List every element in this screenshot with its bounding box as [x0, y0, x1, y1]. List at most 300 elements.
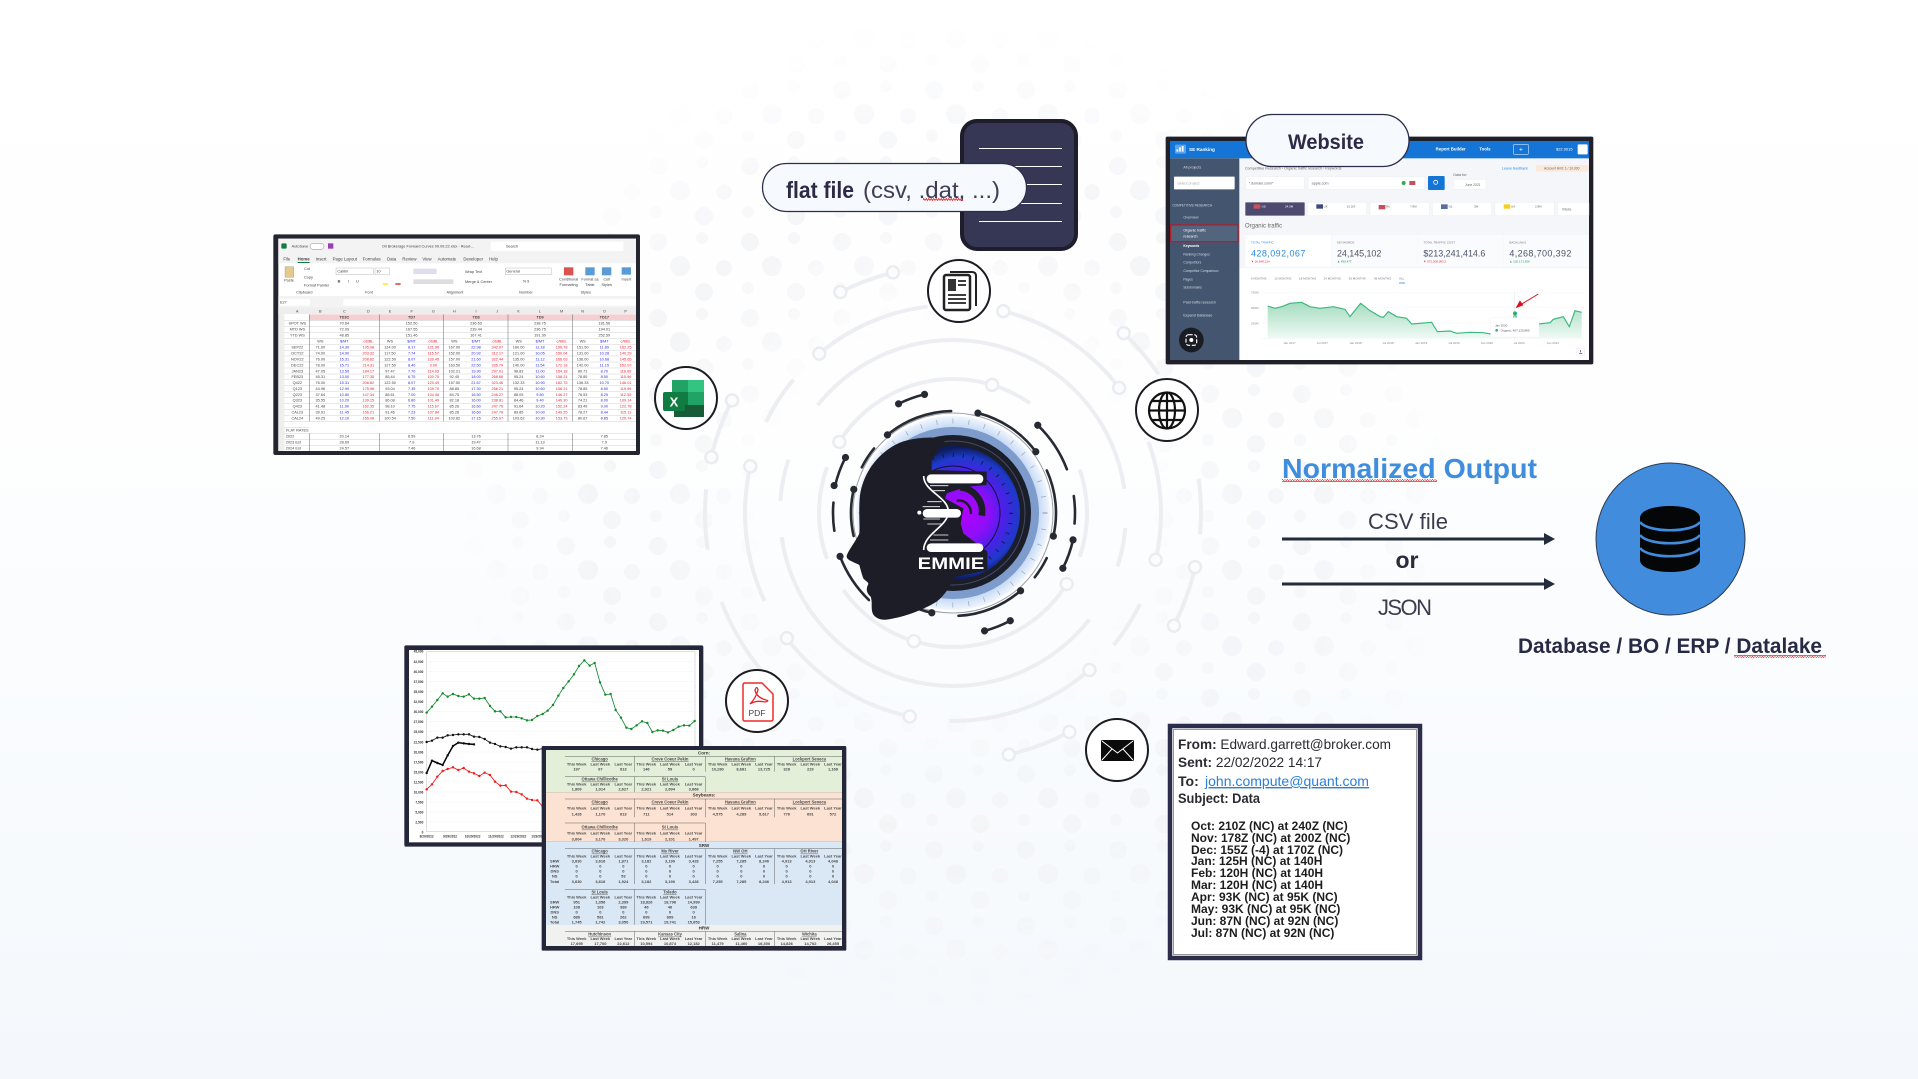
spreadsheet grid: 158.21	[556, 387, 568, 391]
SRW section: 686	[573, 915, 581, 920]
soybeans section: Lockport Seneca	[793, 799, 827, 804]
spreadsheet grid: 10.20	[535, 405, 545, 409]
website stat cards: $213,241,414.6	[1423, 248, 1485, 258]
website sidebar: Overview	[1183, 215, 1199, 219]
spreadsheet grid: 17.30	[471, 387, 481, 391]
spreadsheet grid: 8.50	[601, 387, 608, 391]
HRW section: 26,455	[827, 941, 840, 946]
panel: excel spreadsheet screenshot: Number	[519, 291, 534, 295]
spreadsheet grid: 11.12	[535, 357, 545, 361]
spreadsheet grid: 11.45	[340, 411, 349, 415]
SRW section: 1,745	[572, 920, 582, 925]
SRW section: HRW	[550, 864, 560, 869]
SRW section: 0	[622, 864, 625, 869]
spreadsheet grid: 102.21	[448, 369, 460, 373]
panel: excel spreadsheet screenshot: Insert	[622, 278, 632, 282]
website traffic chart: 6 MONTHS	[1251, 277, 1266, 281]
corn section: 2,627	[618, 787, 629, 792]
soybeans section: Last Year	[755, 805, 773, 810]
website stat cards: TOTAL TRAFFIC	[1251, 241, 1274, 245]
spreadsheet grid: 15.31	[340, 381, 349, 385]
SRW section: 15,653	[688, 920, 701, 925]
soybeans section: Last Year	[685, 830, 703, 835]
panel: email	[1170, 726, 1420, 958]
panel: excel spreadsheet screenshot: Automate	[438, 257, 457, 262]
SRW section: 7,255	[713, 859, 723, 864]
spreadsheet grid: 122.50	[384, 357, 396, 361]
spreadsheet grid: 342.97	[491, 346, 503, 350]
EMMIE central logo	[780, 340, 1126, 686]
spreadsheet grid: 98.83	[514, 369, 523, 373]
icon: database circle	[1596, 463, 1745, 615]
SRW section: 0	[645, 869, 648, 874]
head silhouette and DNA mark	[847, 437, 987, 620]
spreadsheet grid: 121.00	[513, 352, 525, 356]
spreadsheet grid: 100.54	[384, 417, 397, 421]
spreadsheet grid: 78.85	[578, 375, 587, 379]
spreadsheet grid: 121.96	[427, 346, 439, 350]
corn section	[567, 751, 842, 792]
SRW section: Total	[550, 920, 559, 925]
spreadsheet grid: 70.64	[340, 322, 350, 326]
website traffic chart: 750M	[1251, 291, 1259, 295]
website heading: organic traffic: Organic traffic	[1245, 224, 1282, 230]
SRW section: 19,741	[664, 920, 677, 925]
SRW section: NS	[552, 915, 558, 920]
SRW section: 18,826	[640, 900, 653, 905]
SRW section: SRW	[699, 843, 710, 848]
corn section: Last Week	[591, 761, 611, 766]
spreadsheet grid: 13.50	[340, 369, 349, 373]
spreadsheet grid: TD17	[600, 316, 609, 320]
panel: excel spreadsheet screenshot: View	[422, 257, 433, 262]
website top bar	[1170, 141, 1589, 158]
spreadsheet grid: I	[475, 309, 477, 313]
SRW section: 899	[667, 915, 674, 920]
SRW section: 0	[786, 874, 789, 879]
website country tabs: 7.8M	[1410, 205, 1417, 209]
soybeans section: Last Year	[615, 805, 633, 810]
spreadsheet grid: 37.64	[316, 393, 326, 397]
spreadsheet grid: 8.07	[408, 381, 415, 385]
corn section: 1,014	[595, 787, 606, 792]
spreadsheet grid: TD7	[408, 316, 415, 320]
website sidebar: Paid traffic research	[1183, 300, 1216, 304]
SRW section: 699	[643, 915, 650, 920]
SRW section: 0	[809, 864, 812, 869]
icon: globe	[1136, 379, 1198, 441]
SRW section: Last Week	[660, 894, 681, 899]
HRW section: 22,612	[617, 941, 630, 946]
spreadsheet grid: 118.69	[620, 369, 631, 373]
soybeans section: 711	[643, 811, 650, 816]
corn section: Last Year	[615, 782, 633, 787]
panel: excel spreadsheet screenshot: AutoSave	[292, 245, 308, 249]
SRW section: 0	[809, 869, 812, 874]
spreadsheet grid: 151.50	[577, 346, 589, 350]
spreadsheet grid: 8.00	[601, 399, 608, 403]
spreadsheet grid: 88.85	[450, 387, 459, 391]
spreadsheet grid: c/BBL	[492, 340, 502, 344]
HRW section: This Week	[637, 936, 657, 941]
spreadsheet grid: Q422	[293, 381, 302, 385]
SRW section: 0	[832, 869, 835, 874]
spreadsheet grid: 15.71	[340, 363, 349, 367]
spreadsheet grid: DEC22	[291, 363, 304, 367]
corn section: 328	[783, 766, 791, 771]
spreadsheet grid: 8.44	[601, 411, 609, 415]
website filters: Account limit: 1 / 10,000	[1544, 166, 1580, 170]
spreadsheet grid: 152.00	[448, 352, 460, 356]
spreadsheet grid: 162.35	[362, 405, 374, 409]
website sidebar: All projects	[1183, 166, 1201, 170]
spreadsheet grid: 127.50	[384, 363, 396, 367]
spreadsheet grid: 44.96	[316, 387, 325, 391]
SRW section: 3,616	[595, 859, 606, 864]
soybeans section: 4,289	[736, 811, 747, 816]
HRW section: Last Week	[732, 936, 752, 941]
HRW section	[567, 926, 842, 946]
spreadsheet grid: 120.49	[427, 357, 439, 361]
spreadsheet grid	[278, 307, 636, 451]
spreadsheet grid: WS	[580, 340, 586, 344]
corn section: This Week	[567, 761, 587, 766]
spreadsheet grid: 72.09	[340, 328, 349, 332]
spreadsheet grid: 10.68	[600, 357, 609, 361]
HRW section: Salina	[734, 932, 747, 937]
spreadsheet grid: 9.00	[601, 405, 608, 409]
soybeans section: 303	[690, 811, 698, 816]
spreadsheet grid: WS	[317, 340, 324, 344]
panel: pdf grain table	[542, 746, 846, 951]
spreadsheet grid: 268.66	[491, 375, 503, 379]
corn section: This Week	[637, 782, 657, 787]
y axis labels: 5,000	[415, 810, 424, 814]
website sidebar: Competitor Comparison	[1183, 269, 1219, 273]
website filters: Competitive Research › Organic traffic research › Keywords	[1245, 167, 1342, 171]
HRW section: 10,874	[664, 941, 677, 946]
spreadsheet grid: 47.05	[316, 369, 325, 373]
spreadsheet grid: 97.47	[385, 369, 395, 373]
soybeans section: 776	[783, 811, 791, 816]
soybeans section: Last Week	[660, 830, 681, 835]
website traffic chart: Jan 2021	[1547, 341, 1559, 345]
SRW section: 19,571	[640, 920, 653, 925]
SRW section: 7,255	[713, 879, 723, 884]
SRW section	[550, 843, 842, 925]
spreadsheet grid: 28.69	[340, 441, 349, 445]
panel: pdf line chart	[404, 645, 703, 847]
spreadsheet grid: 10.20	[340, 399, 349, 403]
icon: excel: X	[670, 394, 679, 410]
soybeans section: St Louis	[662, 825, 679, 830]
soybeans section: Creve Coeur Pekin	[652, 799, 689, 804]
soybeans section	[567, 793, 842, 841]
y axis labels: 22,500	[414, 740, 424, 744]
x axis labels	[420, 835, 546, 839]
spreadsheet grid: C	[343, 309, 346, 313]
website traffic chart: Jan 2019	[1415, 341, 1428, 345]
arrow: CSV output	[1282, 533, 1555, 545]
spreadsheet grid: 16.60	[471, 405, 481, 409]
SRW section: 18,796	[664, 900, 677, 905]
spreadsheet grid: 236.75	[534, 328, 546, 332]
corn section: This Week	[567, 782, 587, 787]
SRW section: 0	[786, 869, 789, 874]
spreadsheet grid: 246.27	[491, 393, 503, 397]
soybeans section: This Week	[777, 805, 797, 810]
spreadsheet grid: 10.28	[600, 352, 609, 356]
spreadsheet grid: 114.93	[428, 369, 439, 373]
spreadsheet grid: 95.24	[514, 375, 524, 379]
SRW section: 1,871	[618, 859, 629, 864]
corn section: 97	[598, 766, 603, 771]
spreadsheet grid: 93.04	[385, 387, 396, 391]
SRW section: 0	[717, 874, 720, 879]
website traffic chart: 36 MONTHS	[1374, 277, 1391, 281]
panel: excel spreadsheet screenshot: Oil Brokerage Forward Curves 09.09.22.xlsx - Read-...	[382, 245, 474, 249]
label: flat file pill: (csv, .dat, ...)	[863, 177, 1000, 203]
logo wordmark: EMMIE	[918, 554, 984, 573]
spreadsheet grid: 9.80	[536, 393, 544, 397]
green series	[427, 660, 695, 732]
soybeans section: 1,170	[595, 811, 606, 816]
SRW section: Chicago	[591, 849, 608, 854]
soybeans section: Soybeans:	[693, 793, 716, 798]
SRW section: 0	[576, 869, 579, 874]
spreadsheet grid: 120.49	[427, 381, 439, 385]
SRW section: 103	[597, 905, 604, 910]
website traffic chart: Organic: 407,133,899	[1501, 329, 1530, 333]
dark orbit arcs	[780, 340, 1126, 686]
corn section: 2,694	[665, 787, 676, 792]
SRW section: 0	[599, 874, 602, 879]
HRW section: 12,182	[688, 941, 701, 946]
y axis labels: 7,500	[415, 800, 424, 804]
y axis labels: 25,000	[414, 730, 424, 734]
panel: excel spreadsheet screenshot: Styles	[601, 283, 612, 287]
spreadsheet grid: 48.85	[340, 334, 349, 338]
SRW section: St Louis	[591, 889, 609, 894]
website traffic chart: 30 MONTHS	[1349, 277, 1366, 281]
spreadsheet grid: 7.74	[408, 352, 416, 356]
website stat cards: ▲ 102,171,929	[1509, 259, 1530, 263]
lens rings	[853, 413, 1053, 613]
spreadsheet grid: 150.04	[556, 352, 568, 356]
website traffic chart: Jan 2020	[1481, 341, 1493, 345]
spreadsheet grid: 157.50	[448, 381, 460, 385]
website sidebar: Competitors	[1183, 261, 1202, 265]
spreadsheet grid: 323.46	[491, 381, 503, 385]
spreadsheet grid: 98.10	[385, 405, 395, 409]
soybeans section: 2,101	[665, 836, 676, 841]
spreadsheet grid: 15.31	[340, 357, 349, 361]
SRW section: Last Year	[615, 853, 633, 858]
spreadsheet grid: 8.40	[408, 363, 415, 367]
label: database targets: Database / BO / ERP / Datalake	[1518, 635, 1822, 658]
corn section: Corn:	[698, 751, 710, 756]
website traffic chart	[1251, 277, 1585, 356]
panel: website screenshot	[1166, 137, 1593, 364]
spreadsheet grid: E	[389, 309, 392, 313]
SRW section: Last Year	[824, 853, 842, 858]
website country tabs	[1245, 202, 1589, 216]
SRW section: 3,190	[665, 859, 676, 864]
label: flat file pill: flat file	[786, 177, 854, 203]
spreadsheet grid: 8.25	[601, 393, 608, 397]
spreadsheet grid: $/MT	[600, 340, 609, 344]
SRW section: 3,182	[641, 859, 652, 864]
corn section: Last Year	[615, 761, 633, 766]
SRW section: 0	[832, 874, 835, 879]
HRW section: Last Year	[615, 936, 633, 941]
panel: excel spreadsheet screenshot: % 9	[523, 280, 529, 284]
website stat cards	[1245, 235, 1589, 267]
SRW section: 0	[669, 910, 672, 915]
SRW section: 0	[599, 869, 602, 874]
SRW section: OH River	[800, 849, 819, 854]
HRW section: This Week	[708, 936, 728, 941]
spreadsheet grid: 74.00	[316, 352, 325, 356]
SRW section: 3,428	[689, 879, 699, 884]
SRW section: 0	[740, 869, 743, 874]
SRW section: This Week	[777, 853, 797, 858]
HRW section: Last Year	[755, 936, 773, 941]
y axis labels: 32,500	[414, 700, 424, 704]
SRW section: 0	[693, 864, 696, 869]
SRW section: Last Week	[660, 853, 681, 858]
spreadsheet grid: 2024 Est	[286, 447, 302, 451]
panel: excel spreadsheet screenshot: B	[338, 280, 341, 284]
email body	[1191, 819, 1350, 940]
spreadsheet grid: 135.00	[513, 357, 525, 361]
SRW section: 0	[576, 874, 579, 879]
spreadsheet grid: 162.25	[620, 346, 632, 350]
panel: excel spreadsheet screenshot: Merge & Center	[465, 280, 493, 284]
spreadsheet grid: L	[539, 309, 541, 313]
spreadsheet grid: 74.21	[578, 399, 587, 403]
SRW section: 0	[645, 910, 648, 915]
panel: excel spreadsheet screenshot: Table	[585, 283, 595, 287]
corn section: 59	[668, 766, 673, 771]
x axis labels: 8/29/2022	[420, 835, 434, 839]
website sidebar: Pages	[1183, 277, 1193, 281]
corn section: 10,280	[712, 766, 725, 771]
icon: pdf: PDF	[748, 708, 766, 718]
corn section: 1,168	[828, 766, 839, 771]
spreadsheet grid: 92.45	[450, 375, 459, 379]
spreadsheet grid: 335.79	[491, 363, 503, 367]
SRW section: 7,285	[736, 879, 747, 884]
panel: excel spreadsheet screenshot: U	[356, 280, 359, 284]
spreadsheet grid: 82.18	[450, 399, 459, 403]
spreadsheet grid: 214.31	[362, 363, 374, 367]
spreadsheet grid: c/BBL	[363, 340, 373, 344]
spreadsheet grid: 136.00	[577, 357, 589, 361]
spreadsheet grid: 78.27	[578, 411, 587, 415]
spreadsheet grid: J	[496, 309, 498, 313]
spreadsheet grid: WS	[516, 340, 522, 344]
spreadsheet grid: 14.90	[340, 352, 349, 356]
spreadsheet grid: 247.76	[491, 405, 503, 409]
SRW section: 0	[740, 874, 743, 879]
SRW section: 0	[645, 864, 648, 869]
spreadsheet grid: 11.00	[535, 369, 545, 373]
spreadsheet grid: c/BBL	[621, 340, 631, 344]
panel: excel spreadsheet screenshot: Search	[506, 244, 518, 248]
spreadsheet grid: 14.30	[340, 346, 349, 350]
y axis labels: 40,000	[414, 670, 424, 674]
HRW section: 16,350	[758, 941, 771, 946]
email body: Nov: 178Z (NC) at 200Z (NC)	[1191, 831, 1350, 845]
soybeans section: 3,604	[572, 836, 582, 841]
website filters: Data for:	[1453, 173, 1467, 177]
SRW section: NS	[552, 874, 558, 879]
spreadsheet grid: 11.18	[535, 346, 545, 350]
spreadsheet grid: 7.23	[408, 411, 415, 415]
website country tabs: More	[1562, 207, 1572, 212]
spreadsheet grid: 167.00	[448, 346, 460, 350]
SRW section: Last Week	[801, 853, 821, 858]
spreadsheet grid: 208.82	[362, 381, 374, 385]
spreadsheet grid: 7.9	[602, 441, 607, 445]
spreadsheet grid: 252.59	[598, 334, 610, 338]
spreadsheet grid: 258.21	[491, 387, 503, 391]
website stat cards: TOTAL TRAFFIC COST	[1423, 241, 1455, 245]
spreadsheet grid: 104.48	[427, 393, 439, 397]
SRW section: 0	[809, 874, 812, 879]
spreadsheet grid: 177.35	[362, 375, 374, 379]
spreadsheet grid: 103.62	[513, 417, 525, 421]
email headers: From: Edward.garrett@broker.com	[1178, 736, 1391, 752]
website country tabs: UK	[1324, 205, 1328, 209]
spreadsheet grid: 239.44	[470, 328, 483, 332]
website stat cards: BACKLINKS	[1509, 241, 1526, 245]
spreadsheet grid: 88.61	[385, 393, 395, 397]
spreadsheet grid: 194.01	[598, 328, 610, 332]
spreadsheet grid: 140.00	[513, 363, 525, 367]
soybeans section: Last Week	[801, 805, 821, 810]
spreadsheet grid: 9.40	[536, 399, 544, 403]
spreadsheet grid: TD3C	[339, 316, 350, 320]
spreadsheet grid: 115.96	[620, 375, 631, 379]
spreadsheet grid: 45.31	[316, 375, 325, 379]
panel: excel spreadsheet screenshot: 10	[376, 270, 381, 274]
spreadsheet grid: 7.85	[601, 435, 608, 439]
website top bar: SE Ranking	[1189, 147, 1215, 152]
HRW section: 10,594	[640, 941, 653, 946]
SRW section: 0	[669, 864, 672, 869]
panel: excel spreadsheet screenshot: Conditional	[559, 278, 578, 282]
spreadsheet grid: 7.75	[408, 405, 415, 409]
soybeans section: Havana Grafton	[725, 799, 756, 804]
spreadsheet grid: 157.00	[448, 357, 460, 361]
website sidebar: Expand Database	[1183, 314, 1212, 318]
SRW section: Last Week	[591, 894, 611, 899]
soybeans section: 514	[667, 811, 674, 816]
SRW section: 0	[576, 910, 579, 915]
corn section: Last Year	[824, 761, 842, 766]
HRW section: 17,700	[594, 941, 607, 946]
website country tabs: RU	[1386, 205, 1390, 209]
spreadsheet grid: 203.32	[362, 352, 374, 356]
spreadsheet grid: 20.92	[471, 352, 481, 356]
email headers: Sent: 22/02/2022 14:17	[1178, 754, 1322, 770]
HRW section: Last Year	[824, 936, 842, 941]
spreadsheet grid: TD9	[536, 316, 544, 320]
bold black series	[427, 743, 474, 773]
spreadsheet grid: YTD WS	[290, 334, 305, 338]
